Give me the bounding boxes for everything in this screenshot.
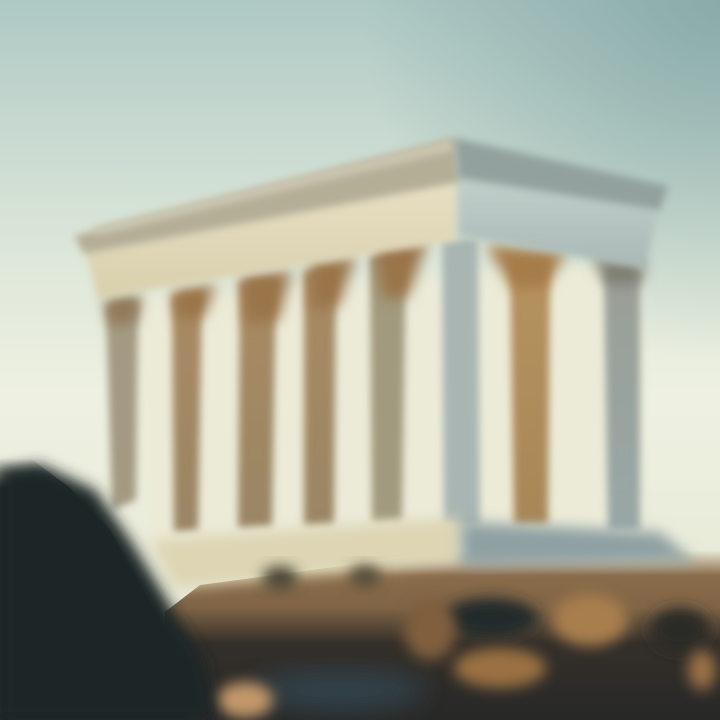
- light backdrop between columns: [130, 260, 640, 550]
- column 3: [238, 278, 276, 528]
- capital shadows side: [486, 244, 566, 288]
- column 2: [172, 292, 202, 532]
- front columns row: [106, 238, 640, 532]
- column capitals: [104, 240, 645, 326]
- roof top highlight: [90, 140, 456, 234]
- ground gradient: [165, 550, 720, 720]
- capital shadows front: [104, 294, 142, 326]
- dark hollows: [442, 598, 538, 638]
- corner column: [442, 238, 480, 525]
- dark hill left: [0, 458, 215, 720]
- column 5: [370, 250, 406, 522]
- roof cornice front: [74, 138, 460, 254]
- stylobate side: [460, 522, 695, 566]
- column 4: [304, 268, 336, 526]
- entablature side: [458, 175, 660, 268]
- side column middle: [510, 262, 550, 524]
- roof cornice side: [455, 138, 668, 210]
- side column right: [604, 272, 640, 530]
- stylobate front: [150, 518, 462, 588]
- entablature front: [85, 178, 458, 298]
- rocky foreground: [0, 458, 716, 720]
- warm rocks: [552, 594, 628, 646]
- column 1: [106, 300, 138, 510]
